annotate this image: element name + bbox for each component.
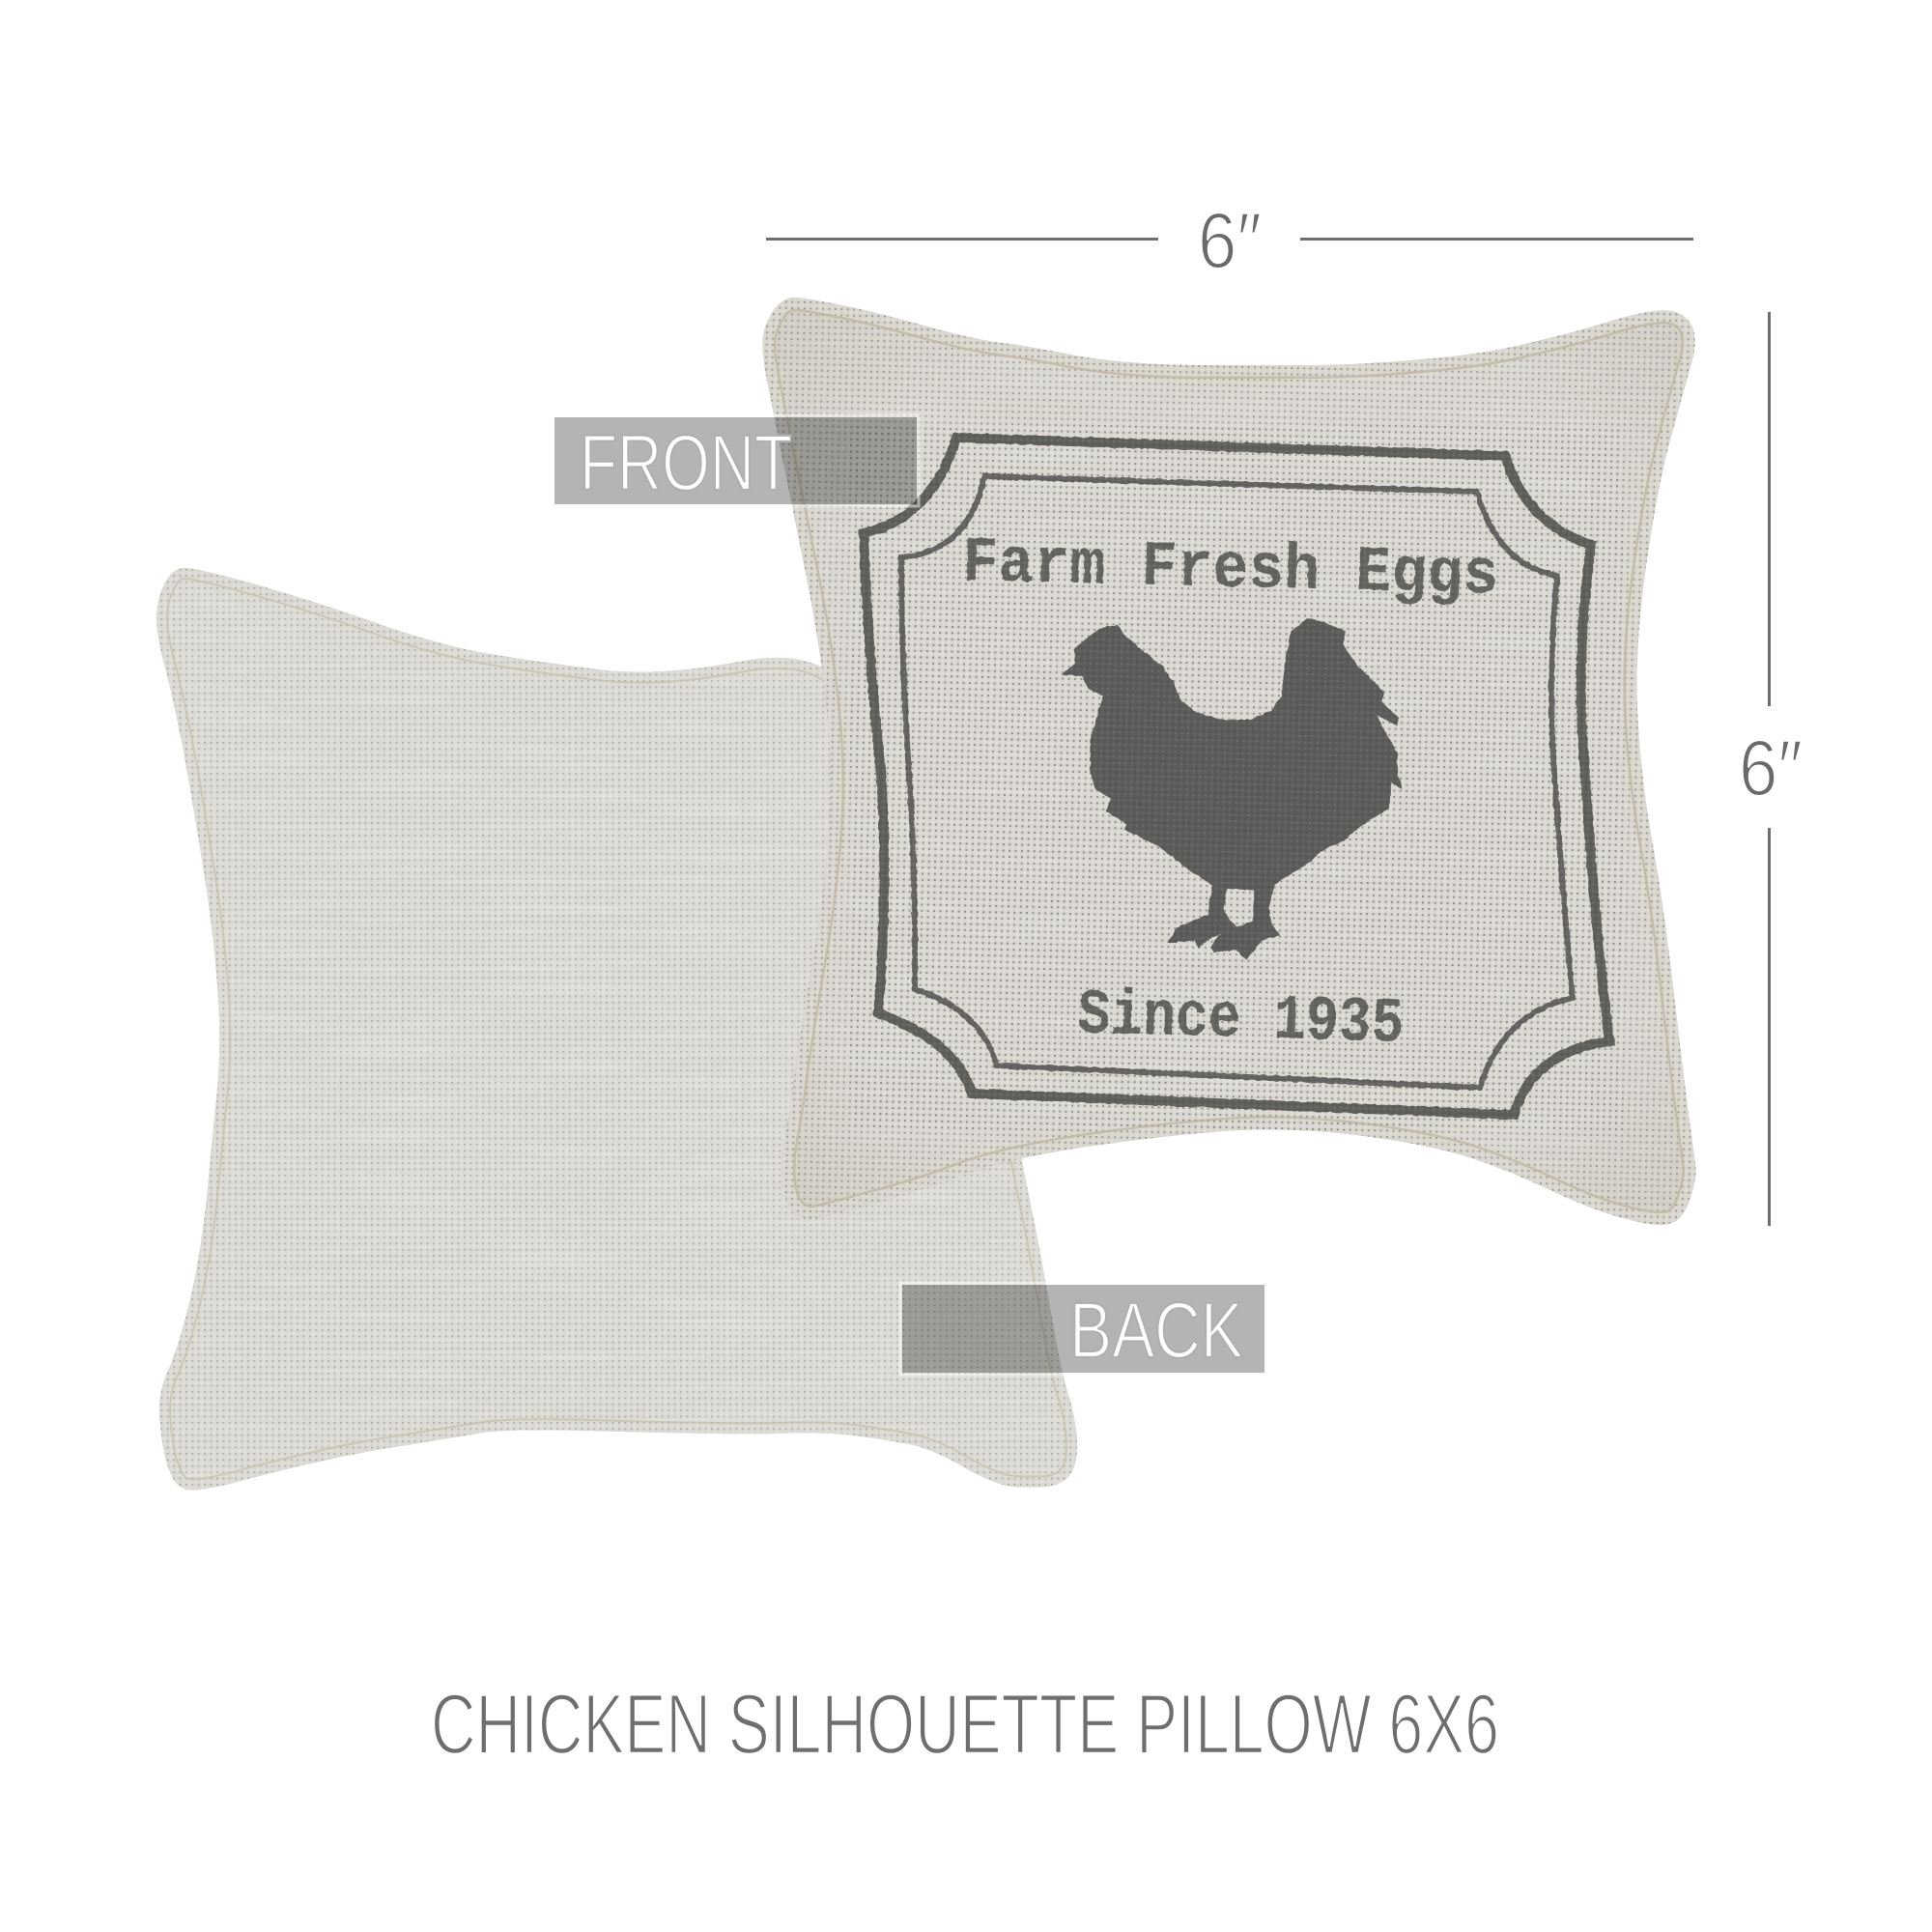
BACK label — [900, 1283, 1266, 1375]
height dimension: 6 inches: 6″ — [1739, 724, 1803, 812]
BACK label: BACK — [1069, 1287, 1243, 1375]
printed chicken silhouette — [1061, 618, 1403, 959]
printed heading: Farm Fresh Eggs: Farm Fresh Eggs — [962, 526, 1499, 612]
printed artwork — [864, 438, 1609, 1115]
FRONT label: FRONT — [580, 419, 792, 507]
back pillow — [145, 560, 1092, 1497]
fabric weave over print — [850, 425, 1623, 1130]
printed outer frame — [864, 438, 1609, 1115]
printed inner frame — [901, 476, 1573, 1088]
caption: product name: CHICKEN SILHOUETTE PILLOW 6X6 — [431, 1676, 1499, 1772]
width dimension: 6 inches — [766, 197, 1693, 285]
width dimension: 6 inches: 6″ — [1198, 197, 1262, 285]
height dimension: 6 inches — [1739, 312, 1803, 1226]
front pillow — [753, 290, 1710, 1232]
printed text: Since 1935: Since 1935 — [1076, 979, 1405, 1061]
infographic canvas — [156, 213, 1801, 1753]
